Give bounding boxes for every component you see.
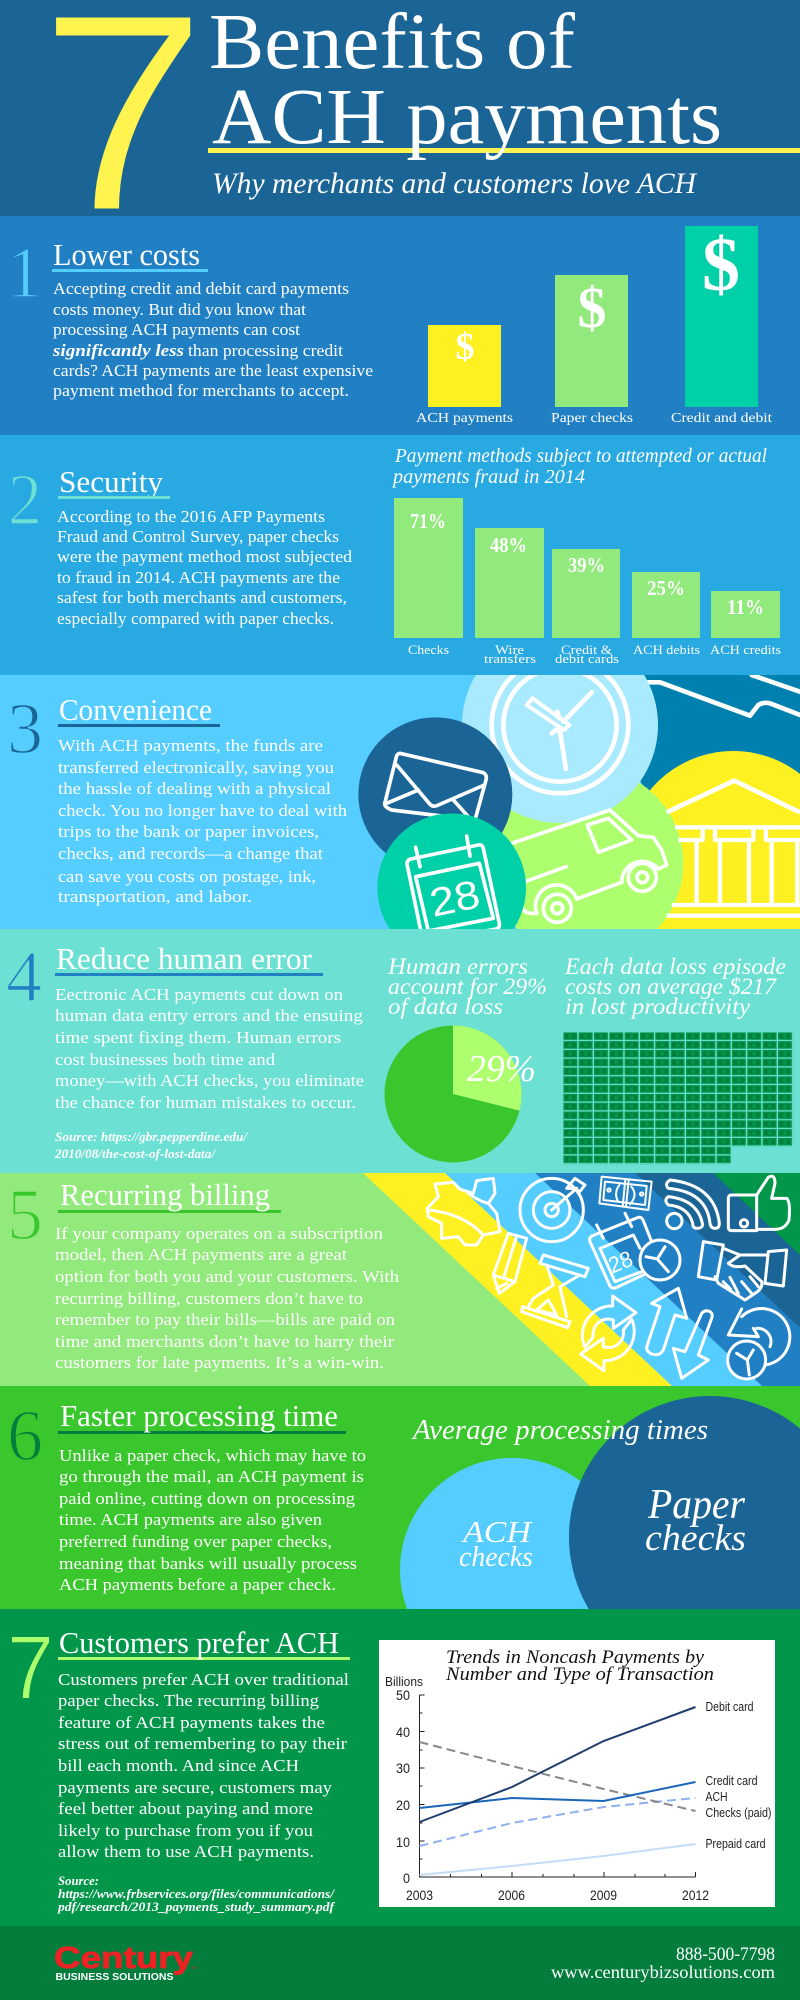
chart: cost bars: $ bbox=[578, 275, 606, 340]
bill grid: 217 bills bbox=[563, 1032, 793, 1164]
bills heading: costs on average $217 bbox=[565, 974, 778, 999]
contact details: www.centurybizsolutions.com bbox=[551, 1962, 775, 1982]
body text: check. You no longer have to deal with bbox=[58, 801, 348, 820]
pie heading: Human errors bbox=[387, 954, 528, 979]
heading: Convenience bbox=[59, 692, 212, 727]
pie heading bbox=[387, 954, 547, 1019]
chart: fraud bars: 39% bbox=[568, 553, 605, 577]
circle: ACH checks: checks bbox=[459, 1541, 533, 1573]
body text: cards? ACH payments are the least expensive bbox=[53, 361, 373, 380]
logo: Century Business Solutions: TM bbox=[191, 1965, 197, 1970]
panel: header bbox=[0, 0, 800, 270]
number 2: 2 bbox=[8, 459, 42, 540]
body text bbox=[58, 736, 348, 906]
body text bbox=[52, 279, 373, 400]
icon: wifi bbox=[666, 1180, 719, 1229]
number 6: 6 bbox=[7, 1395, 43, 1476]
source: https://www.frbservices.org/files/communications/ bbox=[58, 1886, 335, 1901]
circle: paper checks bbox=[569, 1396, 800, 1609]
title: Benefits of bbox=[209, 0, 576, 86]
source: Source: https://gbr.pepperdine.edu/ bbox=[55, 1129, 248, 1144]
body text: preferred funding over paper checks, bbox=[59, 1532, 332, 1551]
body text: If your company operates on a subscription bbox=[55, 1224, 383, 1243]
icon: up and down arrows bbox=[647, 1288, 712, 1378]
title bbox=[209, 0, 722, 161]
body text: According to the 2016 AFP Payments bbox=[57, 507, 325, 526]
panel: 1 lower costs bbox=[0, 216, 800, 435]
body text: Eectronic ACH payments cut down on bbox=[55, 985, 343, 1004]
body text: time. ACH payments are also given bbox=[59, 1510, 322, 1529]
axes bbox=[420, 1695, 696, 1877]
number 5: 5 bbox=[7, 1174, 43, 1255]
body text: human data entry errors and the ensuing bbox=[55, 1006, 363, 1025]
chart: fraud bars: transfers bbox=[484, 651, 536, 666]
chart: cost bars: Credit and debit bbox=[671, 411, 772, 426]
chart: fraud bars: 48% bbox=[490, 533, 527, 557]
icon: thumbs up bbox=[728, 1176, 789, 1231]
source bbox=[57, 1873, 336, 1914]
panel: 4 reduce human error bbox=[0, 929, 800, 1173]
axis labels: 20 bbox=[396, 1797, 410, 1813]
title underline bbox=[208, 148, 800, 153]
contact details bbox=[551, 1944, 775, 1982]
body text: the chance for human mistakes to occur. bbox=[55, 1093, 356, 1112]
chart: fraud bars: 71% bbox=[410, 509, 446, 533]
body text: processing ACH payments can cost bbox=[53, 320, 300, 339]
pie chart bbox=[384, 1026, 536, 1162]
series labels: Prepaid card bbox=[706, 1837, 766, 1851]
icon: envelope bbox=[385, 753, 486, 820]
icon: calendar: 28 bbox=[426, 872, 484, 926]
body text: feature of ACH payments takes the bbox=[58, 1713, 325, 1732]
body text: time and merchants don’t have to harry their bbox=[55, 1332, 395, 1351]
source: pdf/research/2013_payments_study_summary.pdf bbox=[57, 1899, 336, 1914]
heading: Customers prefer ACH bbox=[59, 1625, 339, 1660]
chart: fraud bars: Credit & bbox=[561, 642, 612, 657]
body text: bill each month. And since ACH bbox=[58, 1756, 299, 1775]
body text: checks, and records—a change that bbox=[58, 844, 323, 863]
body text: time spent fixing them. Human errors bbox=[55, 1028, 341, 1047]
diagonal stripes and icons bbox=[363, 1173, 800, 1386]
icon: calendar with clock: 28 bbox=[604, 1245, 636, 1278]
body text: payment method for merchants to accept. bbox=[53, 381, 349, 400]
circle: ACH checks: ACH bbox=[461, 1514, 533, 1549]
chart: cost bars bbox=[416, 223, 772, 426]
icon: target bbox=[520, 1178, 585, 1242]
series labels: Checks (paid) bbox=[706, 1806, 772, 1820]
axis labels: 2003 bbox=[406, 1887, 433, 1903]
icon: calendar with clock bbox=[590, 1213, 680, 1288]
body text bbox=[55, 1224, 400, 1372]
body text: model, then ACH payments are a great bbox=[55, 1245, 347, 1264]
body text bbox=[58, 1670, 349, 1861]
series labels: Debit card bbox=[706, 1700, 754, 1714]
source: Source: bbox=[58, 1873, 99, 1888]
icon: refresh arrows bbox=[581, 1296, 636, 1371]
body text: meaning that banks will usually process bbox=[59, 1554, 357, 1573]
chart: fraud bars: debit cards bbox=[555, 651, 619, 666]
body text: costs money. But did you know that bbox=[53, 300, 306, 319]
body text: recurring billing, customers don’t have to bbox=[55, 1289, 363, 1308]
icon: handshake bbox=[698, 1242, 787, 1300]
body text: transferred electronically, saving you bbox=[58, 758, 334, 777]
chart title: payments fraud in 2014 bbox=[391, 467, 585, 488]
bills heading: in lost productivity bbox=[565, 994, 751, 1019]
pie chart: 29% bbox=[467, 1048, 536, 1090]
panel: 7 customers prefer ACH bbox=[0, 1609, 800, 1926]
number 1: 1 bbox=[6, 232, 43, 313]
body text: to fraud in 2014. ACH payments are the bbox=[57, 568, 340, 587]
number 7: 7 bbox=[7, 1618, 54, 1719]
heading: Security bbox=[59, 464, 163, 499]
body text: especially compared with paper checks. bbox=[57, 609, 334, 628]
line chart: Billions bbox=[385, 1675, 423, 1689]
axis labels: 0 bbox=[403, 1870, 410, 1886]
body text: paid online, cutting down on processing bbox=[59, 1489, 355, 1508]
data lines bbox=[420, 1707, 696, 1875]
icon: calendar bbox=[407, 836, 499, 942]
chart: fraud bars: ACH credits bbox=[710, 642, 781, 657]
chart title bbox=[391, 446, 767, 488]
icon: banknote bbox=[599, 1177, 652, 1210]
contact details: 888-500-7798 bbox=[676, 1944, 775, 1965]
axis labels: 2006 bbox=[498, 1887, 525, 1903]
subtitle: Why merchants and customers love ACH bbox=[212, 167, 698, 200]
chart: fraud bars: 11% bbox=[727, 595, 764, 619]
axis labels: 10 bbox=[396, 1834, 410, 1850]
axis labels: 40 bbox=[396, 1724, 410, 1740]
icon: hourglass bbox=[522, 1255, 588, 1328]
processing time circles bbox=[400, 1396, 800, 1609]
axis labels: 2009 bbox=[590, 1887, 617, 1903]
chart: cost bars: $ bbox=[456, 326, 474, 368]
icon: bank bbox=[667, 781, 800, 916]
number 4: 4 bbox=[6, 936, 42, 1017]
icon: clock bbox=[492, 657, 628, 793]
body text: Customers prefer ACH over traditional bbox=[58, 1670, 349, 1689]
heading: Lower costs bbox=[53, 237, 200, 272]
body text: cost businesses both time and bbox=[55, 1050, 276, 1069]
number 3: 3 bbox=[7, 688, 43, 769]
body text: go through the mail, an ACH payment is bbox=[59, 1467, 364, 1486]
heading: Faster processing time bbox=[60, 1398, 338, 1433]
body text: customers for late payments. It’s a win-win. bbox=[55, 1353, 384, 1372]
chart: fraud bars: Checks bbox=[408, 642, 449, 657]
body text: ACH payments before a paper check. bbox=[59, 1575, 336, 1594]
chart title bbox=[445, 1647, 714, 1685]
bills heading: Each data loss episode bbox=[564, 954, 786, 979]
icon: undo with clock bbox=[728, 1309, 790, 1379]
panel: 3 convenience bbox=[0, 675, 800, 929]
body text: feel better about paying and more bbox=[58, 1799, 313, 1818]
body text: Accepting credit and debit card payments bbox=[53, 279, 349, 298]
axis labels bbox=[396, 1687, 709, 1903]
pie heading: of data loss bbox=[388, 994, 503, 1019]
chart: cost bars: Paper checks bbox=[551, 411, 633, 426]
axis labels: 2012 bbox=[682, 1887, 709, 1903]
chart heading: Average processing times bbox=[411, 1415, 708, 1446]
series labels: ACH bbox=[706, 1790, 728, 1804]
chart: cost bars: $ bbox=[702, 223, 740, 307]
body text: trips to the bank or paper invoices, bbox=[58, 822, 319, 841]
body text bbox=[59, 1446, 366, 1594]
panel: 2 security bbox=[0, 435, 800, 675]
body text: stress out of remembering to pay their bbox=[58, 1734, 348, 1753]
body text: payments are secure, customers may bbox=[58, 1778, 333, 1797]
title: ACH payments bbox=[212, 74, 722, 161]
body text: likely to purchase from you if you bbox=[58, 1821, 313, 1840]
chart title: Number and Type of Transaction bbox=[445, 1664, 714, 1685]
axis labels: 30 bbox=[396, 1760, 410, 1776]
body text: remember to pay their bills—bills are paid on bbox=[55, 1310, 395, 1329]
chart: fraud bars: ACH debits bbox=[633, 642, 700, 657]
body text bbox=[55, 985, 364, 1112]
panel: 6 faster processing time bbox=[0, 1386, 800, 1609]
panel: 5 recurring billing bbox=[0, 1173, 800, 1386]
source: 2010/08/the-cost-of-lost-data/ bbox=[54, 1146, 216, 1161]
logo: Century Business Solutions bbox=[54, 1940, 197, 1983]
chart: cost bars: ACH payments bbox=[416, 411, 513, 426]
series labels bbox=[706, 1700, 772, 1851]
icon: pencil bbox=[493, 1233, 527, 1293]
body text bbox=[57, 507, 353, 628]
chart: fraud bars: Wire bbox=[495, 642, 524, 657]
panel: footer bbox=[0, 1926, 800, 2000]
body text: significantly less bbox=[52, 341, 184, 360]
axis labels: 50 bbox=[396, 1687, 410, 1703]
body text: money—with ACH checks, you eliminate bbox=[55, 1071, 364, 1090]
circle: ACH checks bbox=[400, 1458, 589, 1609]
body text: option for both you and your customers. With bbox=[55, 1267, 400, 1286]
body text: were the payment method most subjected bbox=[57, 547, 353, 566]
chart title: Trends in Noncash Payments by bbox=[446, 1647, 705, 1668]
logo: Century Business Solutions: BUSINESS SOLUTIONS bbox=[56, 1971, 174, 1983]
body text: paper checks. The recurring billing bbox=[58, 1691, 319, 1710]
body text: than processing credit bbox=[188, 341, 343, 360]
icon: delivery van bbox=[512, 810, 667, 922]
icon cluster: convenience bbox=[358, 675, 800, 929]
body text: With ACH payments, the funds are bbox=[58, 736, 323, 755]
body text: safest for both merchants and customers, bbox=[57, 588, 347, 607]
logo: Century Business Solutions: Century bbox=[54, 1940, 194, 1975]
chart: fraud bars: 25% bbox=[647, 576, 685, 600]
body text: can save you costs on postage, ink, bbox=[58, 867, 316, 886]
body text: Unlike a paper check, which may have to bbox=[59, 1446, 366, 1465]
chart: fraud bars bbox=[394, 498, 781, 666]
body text: allow them to use ACH payments. bbox=[58, 1842, 314, 1861]
line chart bbox=[379, 1640, 775, 1907]
chart title: Payment methods subject to attempted or actual bbox=[394, 446, 767, 467]
icon: gear bbox=[427, 1178, 500, 1245]
heading: Recurring billing bbox=[60, 1177, 270, 1212]
source bbox=[54, 1129, 248, 1161]
pie heading: account for 29% bbox=[388, 974, 547, 999]
bills heading bbox=[564, 954, 786, 1019]
heading: Reduce human error bbox=[56, 941, 313, 976]
body text: transportation, and labor. bbox=[58, 887, 252, 906]
body text: Fraud and Control Survey, paper checks bbox=[57, 527, 339, 546]
body text: the hassle of dealing with a physical bbox=[58, 779, 331, 798]
circle: paper checks: Paper bbox=[647, 1482, 746, 1528]
series labels: Credit card bbox=[706, 1774, 758, 1788]
circle: paper checks: checks bbox=[645, 1518, 746, 1559]
